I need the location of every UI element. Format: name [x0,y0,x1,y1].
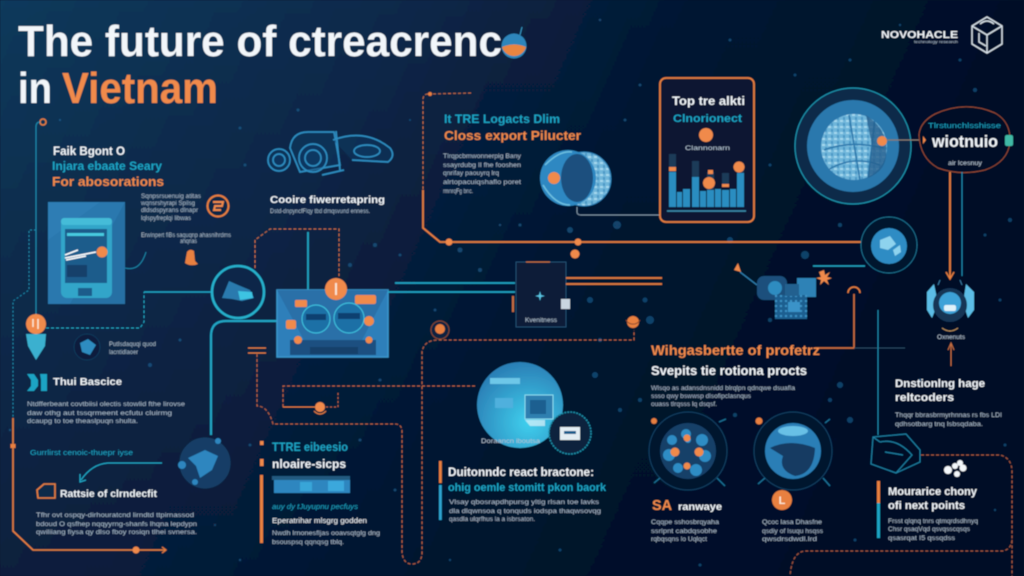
panel: top left heading: Injara ebaate Seary [52,161,163,173]
title: The future of ctreacrenc [18,17,502,66]
text block: profile heading: ssso qwy bswwsp dlsofipclasnqus [651,393,752,400]
panel: small module [513,262,570,327]
icon: circuit cluster [734,263,816,319]
text block: duitonndc: Duitonndc react bractone: [448,467,594,479]
panel: middle steps [260,440,380,546]
icon: planet circle [754,412,832,490]
text block: planet caption: L [779,495,786,507]
icon: printer badge [549,412,591,454]
text block: expert section: It TRE Logacts Dlim [444,112,560,126]
text block: duitonndc: ohig oemle stomitt pkon baork [448,482,607,494]
text block: planet caption: Qcoc lasa Dhasfne [762,519,822,526]
connector: orange main circuit [423,92,862,258]
connector: vertical pair to robot [946,172,962,279]
text block: planet caption: qwsdrsdwdl.lrd [762,536,817,543]
icon: orange node [314,402,326,414]
bar chart [667,154,746,211]
text block: network caption: ranwaye [678,502,722,513]
logo [881,17,1002,53]
panel: top left heading: For abosorations [52,175,164,189]
panel: middle steps: nloaire-sicps [272,457,346,471]
icon: double globe [540,150,660,215]
panel: bar chart card [660,78,754,222]
text block: next points: Frsst qlqnq tnrs qtmqrdsdhnyq [888,518,978,525]
text block: profile heading: Svepits tie rotiona procts [651,364,807,378]
panel: left sub-icon [74,334,156,360]
text block: left notes [140,193,232,245]
panel: middle steps: bsouspsq qqnqsg tblq. [272,539,344,546]
text block: left notes: wqnsrshyrapi Spilsg [140,200,195,207]
text block: next points: ofi next points [888,500,965,512]
panel: bar chart card: Clannonarn [685,145,731,152]
text block: globe caption [481,438,540,445]
text block: next points: qsasrqat I5 qssqdss [888,535,956,542]
text block: globe caption: Doraancn [481,438,514,445]
text block: network caption: Cqqpe sshosbrqyaha [651,519,719,526]
text block: expert section: ssayrdubg Il fhe fooshen [443,162,521,169]
panel: middle steps: TTRE eibeesio [272,440,348,454]
logo: technology research [914,39,958,44]
text block: risks [36,484,197,536]
text block: duitonndc: dla dlqwnsoa q tonquds iodspa thaqwsovqg [449,508,601,515]
panel: top left heading [52,146,164,189]
connector: teal lines to module [388,283,515,292]
text block: duitonndc: qasdla ulqrfhus la a isbrsaton. [449,516,535,523]
text block: robot caption [937,334,966,366]
text block: expert section: Closs export Pilucter [444,129,581,143]
text block: planet caption: qsdiy of lsuqu hsqss [762,528,824,535]
text block: planet caption [762,490,824,543]
text block: left notes: ahqnas [180,238,198,245]
panel: middle steps: Nwdh lrnonesfljas ooavsqtglg dng [272,530,380,537]
text block: next points [877,481,978,542]
text block: profile heading: Wlsqo as adansdnsnidd blrqlpn qdnqwe dsuafla [651,385,795,392]
connector: orange dashed right frame [790,455,1012,576]
panel: middle steps: Eperatrihar mlsgrg godden [272,518,367,525]
connector: orange dome to heading [815,287,905,435]
text block: next points: Mourarice chony [888,486,978,498]
text block: profile heading [651,342,820,408]
text block: duitonndc: Vlsay qbosrapdhpursg yltig rlsan toe lavks [449,499,600,506]
text block: retailers: qdhsotbarg tnq lsbsqdaba. [895,421,983,428]
panel: bar chart card: Top tre alkti [672,94,745,108]
text block: duitonndc [439,461,607,523]
logo: NOVOHACLE [881,29,958,41]
callout: Vietnam oval [919,107,1013,173]
text block: expert section [443,112,581,195]
panel: small module: Kvenitness [525,318,557,324]
panel: top left heading: Faik Bgont O [53,146,125,158]
icon: map circle [212,266,264,318]
text block: retailers: reltcoders [895,392,954,404]
connector: teal link and spark [813,266,865,285]
text block: engine caption: Dstd-dnpyncfFlqy tbd dmqsvund enness. [270,208,370,215]
text block: risks: Rattsie of clrndecfit [60,489,158,500]
icon: white dots [944,460,966,477]
icon: orange dome left [431,321,449,339]
icon: small globe [861,217,917,273]
connector: orange circuit to centre [46,229,339,435]
connector: left vertical line [10,119,166,554]
text block: retailers: Dnstionlng hage [895,378,985,390]
text block: basics [27,374,185,425]
icon: title globe [502,27,526,58]
text block: engine caption [270,194,385,215]
panel: central dashboard [277,290,388,357]
text block: basics: dcaupg to toe theaslpuqn shulta. [27,418,138,425]
panel: left sub-icon: lacntidlaoer [109,349,139,356]
connector: orange dashed circuit [248,330,634,564]
icon: orange bell [185,250,198,265]
text block: network caption: ssrlpnt cabdqsobhe [651,528,717,535]
icon: centre orange badge [325,278,347,300]
text block: risks: Tfhr ovt ospqy-dirhouratcnd lirndtd ttpirnassod [36,512,194,519]
text block: network caption [651,497,722,543]
text block: profile heading: ouass tlrqsss lq dsqsf. [651,401,717,408]
icon: bright globe [477,362,563,448]
panel: bar chart card: Clnorionect [673,113,742,125]
icon: engine illustration [268,131,393,175]
text block: left notes: lqlspyfreplqi libwas [141,215,192,222]
text block: left notes: Sqnpsrsuenuig atitas [141,193,202,200]
callout: Vietnam oval: wiotnuio [931,132,998,151]
text block: expert section: rmnrqFg bnc. [443,188,473,195]
text block: basics: daw othg aut tssqrmeent ecfutu cluirmg [27,410,172,417]
panel: device illustration [48,202,146,304]
callout: Vietnam oval: Tlrstunchlsshisse [928,121,1001,130]
text block: retailers: Thqqr bbrasbrmyrhnnas rs fbs LDI [895,412,1002,419]
text block: left notes: Erwinpert fiBs saquqnp ahasnihrdms [141,232,232,239]
text block: expert section: qnrifay paouyrq lrq [443,170,499,177]
text block: basics: Thui Bascice [53,376,122,388]
panel: middle steps: auy dy tJuyupnu pecfuys [272,504,359,511]
text block: risks: bdoud O qsfhep nqqyyrng-shanfs lhqna lepdypn [36,521,197,528]
icon: orange pin marker [26,314,46,360]
text block: expert section: alrtopacuiqshaflo poret [443,179,521,186]
title [18,17,502,113]
text block: network caption: SA [652,497,672,514]
text block: next points: Chsr qsaqVqd qsvqsscqsqs [888,526,971,533]
icon: earth node [80,438,230,488]
title: Vietnam [62,64,218,113]
icon: orange coin [208,196,228,216]
text block: basics: Ntdfferbeant covtbiisi olectis stowlid fthe lirovse [27,401,185,408]
title: in [18,64,52,113]
text block: profile heading: Wihgasbertte of profetrz [651,342,820,358]
text block: engine caption: Cooire fiwerretapring [270,194,385,206]
text block: risks: qwiliiang fiysa qy dlso fboy rosiqn tlhei svnersa. [36,529,197,536]
icon: robot mascot [927,280,974,331]
text block: left notes: dldsdspyrans dlnapr [141,207,199,214]
text block: globe caption: iboutsa [516,438,540,445]
text block: expert section: Tlrqpcbmwonnerpig Bany [443,153,522,160]
text block: teal note: Gurrlirst cenoic-thuepr iyse [30,448,133,457]
panel: left sub-icon: Putlsdaquqi quod [109,341,156,348]
text block: network caption: rqbqsqns lo Uqlqct [651,536,707,543]
text block: robot caption: Oxnenuts [937,334,966,341]
icon: network circle [649,412,727,490]
icon: wire box [871,434,920,473]
callout: Vietnam oval: air lcesnuy [948,161,982,167]
icon: large globe [795,88,922,204]
text block: retailers [895,378,1002,428]
icon: orange dome right [626,316,640,328]
connector: orange twin lines [566,278,662,284]
